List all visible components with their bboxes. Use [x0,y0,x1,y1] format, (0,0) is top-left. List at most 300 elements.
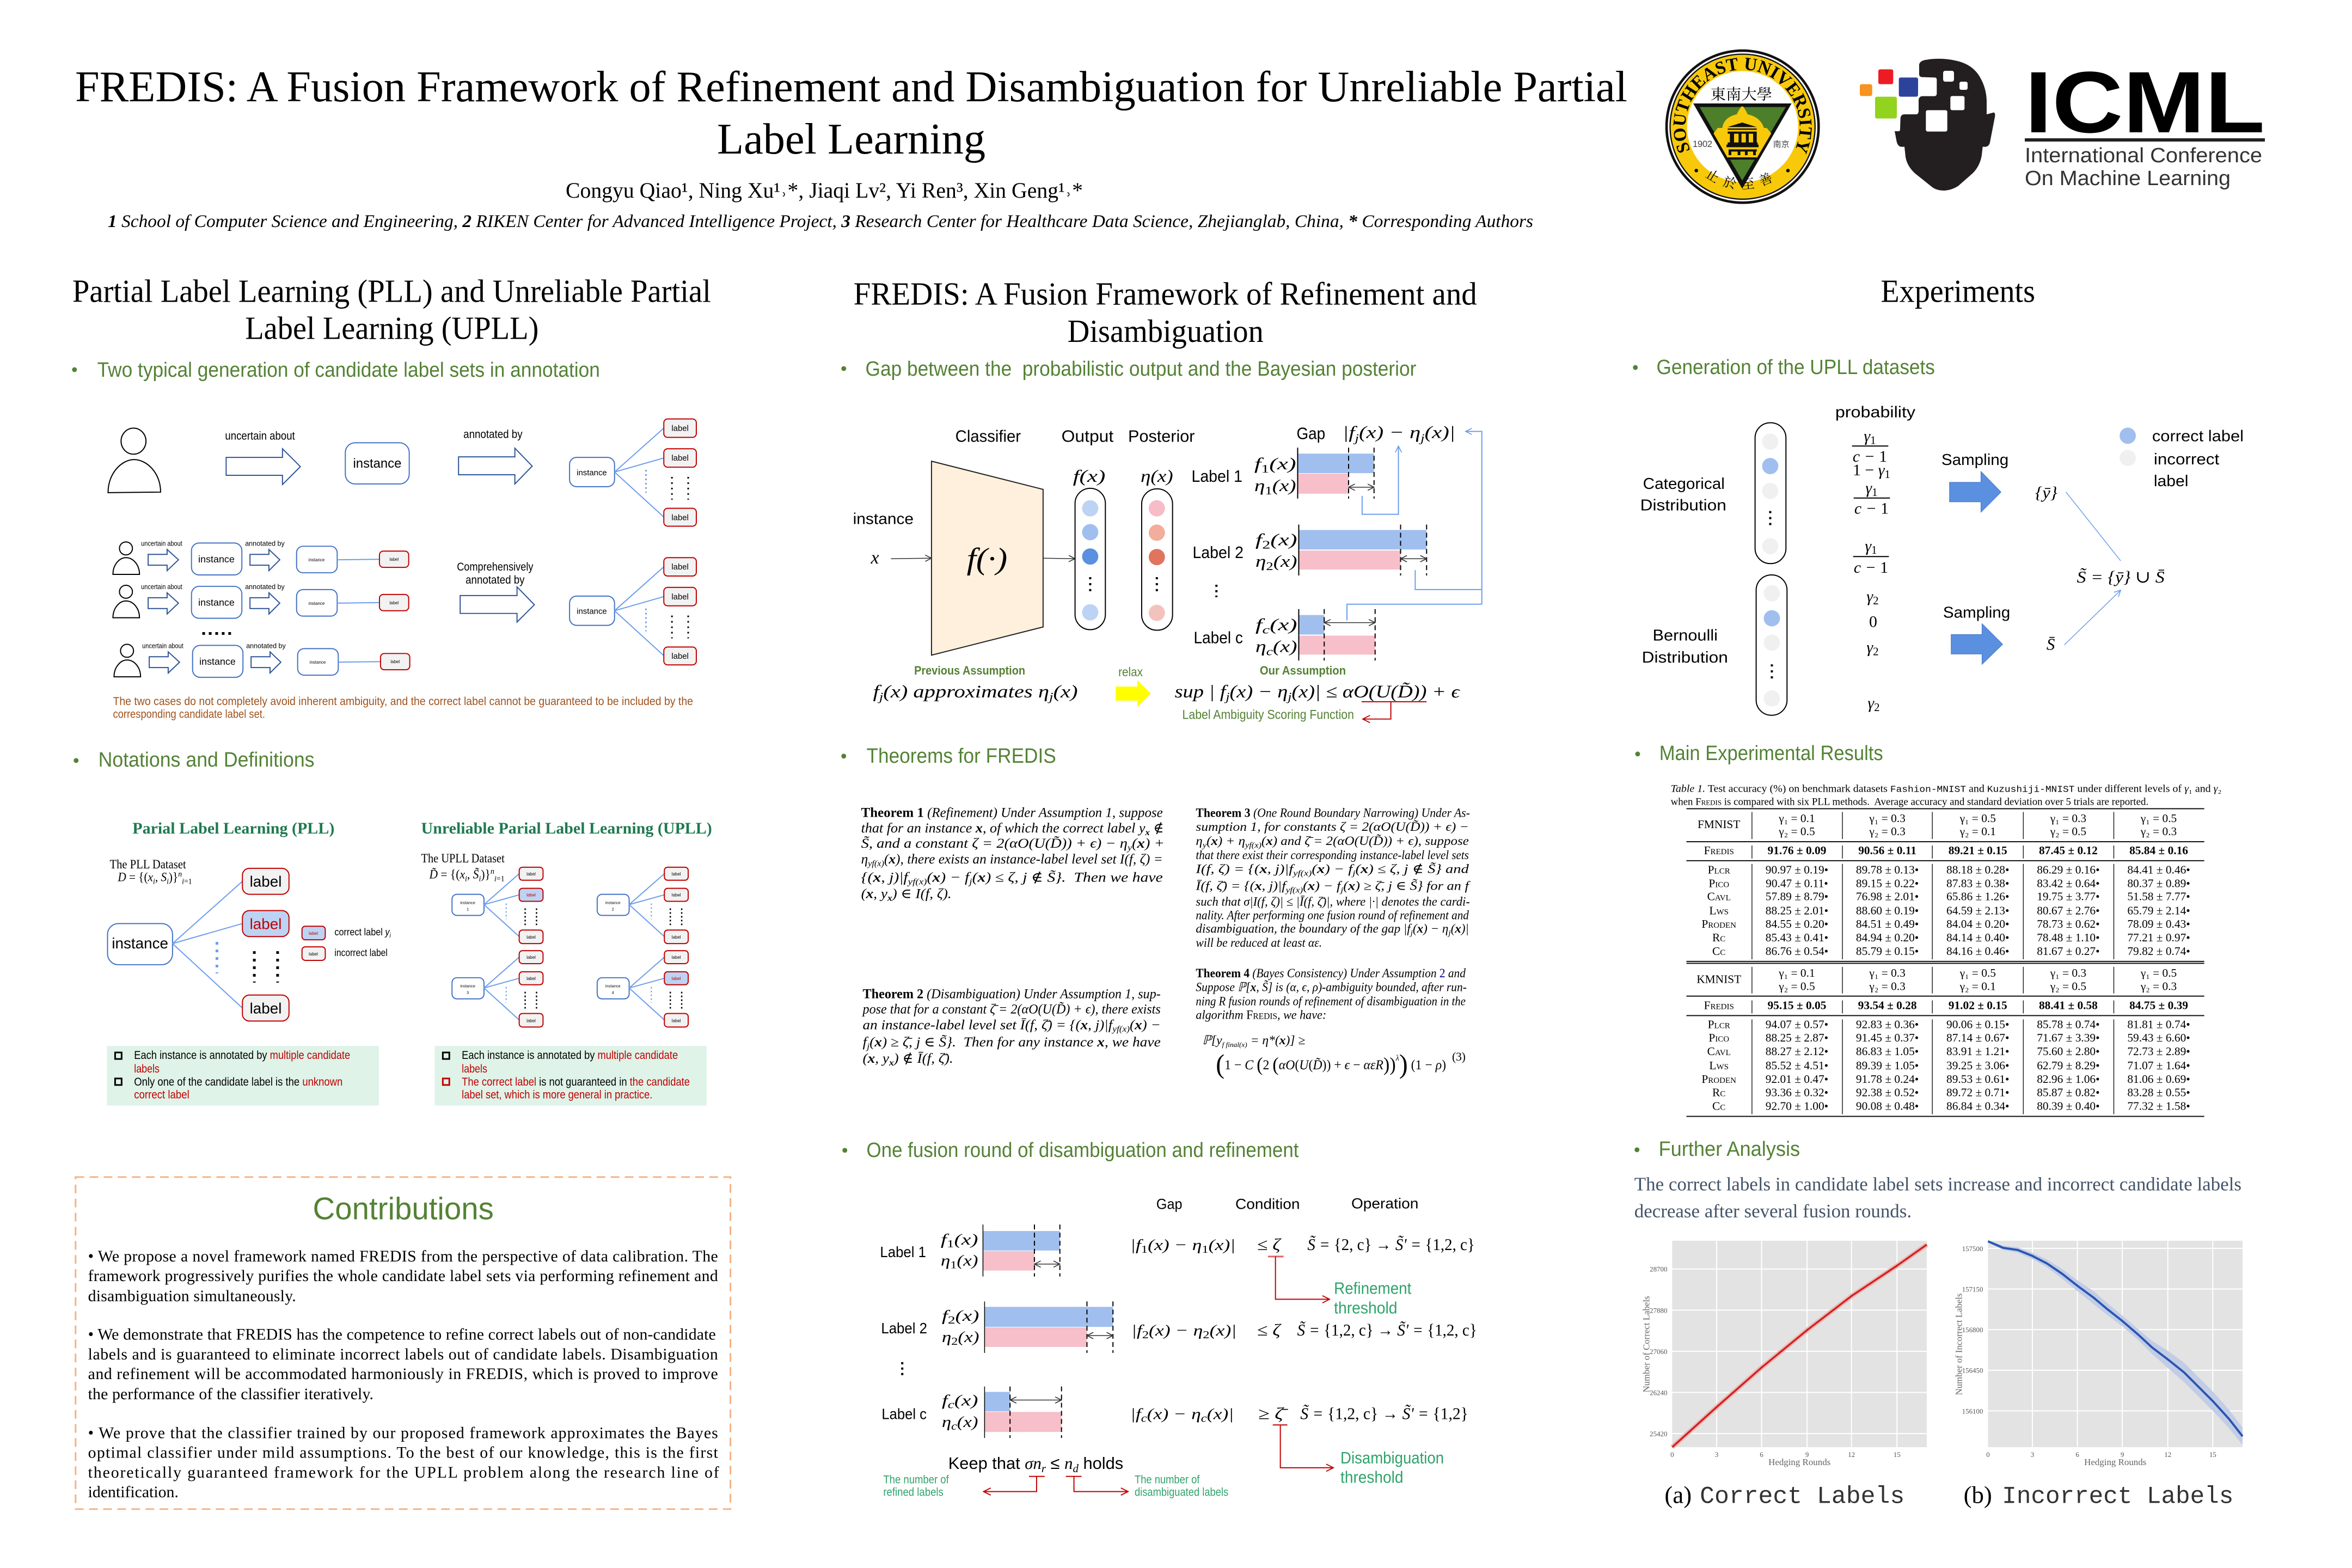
text block: theorem 4: Suppose ℙ[x, S̃] is (α, ϵ, ρ)-ambiguity bounded, after run- [1196,980,1467,994]
tree: instance 1: 1 [467,906,469,911]
fusion row: label 2: 2 [948,1314,955,1326]
previous assumption: Previous Assumption [914,664,1025,677]
text block: contribution 3: theoretically guaranteed framework for the UPLL problem along the research line of [88,1463,719,1481]
text block: contribution 1: • We propose a novel framework named FREDIS from the perspective of data calibration. The [88,1247,718,1265]
diagram: single annotator [108,419,696,526]
text block: theorem 3: x) − f [1308,879,1337,893]
text block: theorem 1: ( [884,852,890,867]
gap row: label c: (x) [1273,637,1297,656]
tree: instance 4: 4 [612,990,614,995]
text block: theorem 2: yf(x) [1111,1025,1130,1034]
text block: theorem 4: f final(x) [1222,1040,1247,1049]
table section: KMNIST: γ₁ = 0.5 [1959,966,1996,979]
text block: theorem 2: x) ≥ ζ̄, j ∈ S̃}. Then for any instance x, we have [874,1035,1155,1050]
probability column: probability [1835,404,1916,421]
chart: incorrect labels: 157500 [1962,1245,1983,1253]
icon: Southeast University seal: SOUTHEAST UNIVERSITY [1673,58,1812,155]
table section: FMNIST: Plcr [1708,863,1730,877]
text block: theorem 3: Ī(f, ζ̄) = {( x, j)|f [1196,879,1283,893]
subheading: candidate label sets: Two typical generation of candidate label sets in annotation [97,359,600,382]
table: accuracy [1687,808,2204,1116]
panel: fusion round [842,1139,1477,1499]
input instance: instance [853,511,914,528]
chart: correct labels: 12 [1848,1450,1855,1459]
text block: theorem 1: x [1144,828,1150,837]
diagram: UPLL dataset: )} [481,868,491,881]
table section: FMNIST: 76.98 ± 2.01• [1856,890,1919,903]
callout: refinement threshold: Refinement [1334,1278,1412,1297]
caption: correct labels: Correct Labels [1700,1484,1904,1511]
keep condition [883,1454,1228,1499]
keep condition: refined labels [883,1486,944,1499]
title: Label Learning [717,115,985,163]
text block: theorem 3: ( [1206,834,1212,848]
probability column: 1 [1871,543,1877,556]
fusion row: label 1: |f [1130,1236,1139,1254]
table section: KMNIST: 90.06 ± 0.15• [1946,1018,2009,1031]
arrow: sampling 1: Sampling [1941,451,2008,469]
text block: theorem 4: C [1245,1058,1254,1073]
text block: theorem 3: ( [1451,922,1456,935]
table section: FMNIST: 84.51 ± 0.49• [1856,917,1919,930]
table section: KMNIST: KMNIST [1696,973,1741,986]
table section: KMNIST: γ₂ = 0.5 [1778,980,1815,993]
table section: FMNIST: γ₂ = 0.1 [1959,825,1996,838]
table section: FMNIST: 84.55 ± 0.20• [1766,917,1828,930]
text block: theorem 3: x) − η [1417,922,1448,935]
text block: theorem 4: λ [1395,1054,1399,1063]
fusion row: label c: c [948,1399,954,1411]
diagram: annotator row 2 [113,583,409,618]
diagram: annotator row 1: uncertain about [141,539,182,547]
fusion row: label c: f [942,1392,946,1409]
text block: theorem 4: ρ) [1436,1058,1446,1073]
table section: FMNIST: 83.42 ± 0.64• [2037,877,2100,890]
fusion row: label 2: (x) [958,1328,979,1346]
diagram: PLL dataset: label [250,1000,281,1016]
diagram: annotator row 3: label [390,659,400,664]
chart: incorrect labels: 156450 [1962,1367,1983,1375]
icon: Southeast University seal: 1902 [1693,139,1712,149]
table section: KMNIST: 86.84 ± 0.34• [1946,1100,2009,1113]
gap row: label 2 [1192,525,1426,575]
table section: FMNIST: 88.60 ± 0.19• [1856,904,1919,917]
table section: KMNIST: Pico [1708,1031,1729,1044]
table section: KMNIST: 89.39 ± 1.05• [1856,1059,1919,1072]
keep condition: Keep that σn [948,1454,1042,1473]
text block: theorem 3: x) − f [1317,862,1347,876]
table section: KMNIST: 93.54 ± 0.28 [1858,999,1917,1012]
column headers: Condition [1235,1196,1300,1212]
fusion row: label 1: (x)| [1209,1236,1235,1254]
gap row: label 2: Label 2 [1192,543,1244,562]
text block: theorem 3: ( [1261,834,1267,848]
previous assumption: (x) [1054,682,1078,702]
text block: theorem 4: 2 [1263,1058,1272,1073]
table section: KMNIST: Proden [1701,1073,1736,1086]
previous assumption [873,664,1078,703]
table section: FMNIST: γ₁ = 0.1 [1778,812,1815,825]
text block: analysis: The correct labels in candidate label sets increase and incorrect candidate labels [1634,1173,2241,1195]
table section: KMNIST [1696,966,2190,1113]
chart: correct labels: 9 [1805,1450,1809,1459]
keep condition: n [1064,1454,1073,1473]
fusion row: label c: S̃ = {1,2, c} → S̃' = {1,2} [1300,1404,1468,1423]
legend: correct and incorrect: correct label y [334,927,390,938]
table section: KMNIST: γ₂ = 0.3 [2140,980,2177,993]
text block: theorem 4: αO [1279,1058,1295,1073]
previous assumption: j [877,690,883,703]
tree: instance 3: instance [460,984,475,989]
callout: UPLL properties: The correct label is not guaranteed in the candidate [462,1076,690,1088]
text block: theorem 4: (3) [1452,1050,1466,1063]
gap row: label 2: (x) [1270,530,1297,549]
chart: incorrect labels: Number of Incorrect Labels [1954,1293,1964,1395]
text block: theorem 3: x)| [1455,922,1469,935]
arrow: sampling 2: Sampling [1943,604,2010,622]
diagram: comprehensively annotated: label [671,562,689,572]
diagram: annotator row 2: instance [309,601,325,606]
tree: instance 1 [452,867,543,944]
input instance [853,511,1075,568]
tree: instance 2: label [672,893,681,898]
table section: KMNIST: 93.36 ± 0.32• [1766,1086,1828,1099]
column headers [1156,1195,1418,1212]
diagram: annotator row 3: uncertain about [142,641,183,650]
ellipsis dots [203,632,235,635]
table rules [1687,808,2204,1116]
table section: KMNIST: 71.67 ± 3.39• [2037,1031,2100,1044]
callout: PLL properties: labels [134,1063,160,1075]
legend: label [2154,473,2189,490]
table section: FMNIST: 77.21 ± 0.97• [2127,931,2190,944]
text block: contribution 3: identification. [88,1483,179,1501]
tree: instance 2: 2 [612,906,614,911]
fusion row: label 1: S̃ = {2, c} → S̃' = {1,2, c} [1307,1235,1475,1254]
probability column: γ [1867,694,1874,712]
table section: KMNIST: 91.45 ± 0.37• [1856,1031,1919,1044]
fusion row: label c: c [1201,1412,1207,1424]
diagram: single annotator: label [671,424,689,433]
probability column: 2 [1874,701,1880,714]
icon: ICML head logo [1860,59,1995,191]
gap row: label 2: f [1255,530,1260,549]
diagram: comprehensively annotated: instance [577,607,607,616]
table section: FMNIST: 19.75 ± 3.77• [2037,890,2100,903]
diagram: PLL dataset: i=1 [182,878,193,886]
panel: notations and definitions [74,749,712,1106]
diagram: PLL dataset: i [167,878,169,886]
text block: theorem 2: x) − [1135,1018,1159,1032]
diagram: UPLL dataset: S̃ [473,867,480,881]
tree: instance 3: label [526,955,536,960]
table section: FMNIST: 84.16 ± 0.46• [1946,945,2009,958]
table section: KMNIST: 90.08 ± 0.48• [1856,1100,1919,1113]
note: inherent ambiguity: corresponding candidate label set. [113,708,265,721]
text block: theorem 4: = η*( [1247,1033,1280,1047]
probability column: 1 [1872,486,1878,499]
chart: incorrect labels: Hedging Rounds [2084,1457,2146,1467]
diagram: UPLL dataset: The UPLL Dataset [421,852,505,865]
probability column: γ [1866,638,1873,656]
table section: FMNIST: 64.59 ± 2.13• [1946,904,2009,917]
callout: PLL properties [107,1046,379,1106]
gap row: label 1: 1 [1265,484,1272,497]
table section: KMNIST: Cavl [1707,1045,1731,1058]
text block: theorem 3: j [1447,929,1451,938]
text block: theorem 1: ( [927,871,933,885]
keep condition: The number of [883,1474,949,1486]
diagram: PLL dataset [108,857,289,1021]
text block: theorem 3: ( [1355,862,1362,876]
fusion row: label 1 [880,1224,1475,1277]
fusion row: label 1: (x) [954,1231,978,1248]
gap row: label 1: 1 [1261,462,1269,475]
diagram: annotator row 1: instance [198,554,235,565]
text block: theorem 3: Theorem 3 (One Round Boundary Narrowing) Under As- [1196,806,1470,819]
text block: theorem 4: ) [1399,1049,1408,1079]
table section: FMNIST: 65.86 ± 1.26• [1946,890,2009,903]
table section: KMNIST: 81.06 ± 0.69• [2127,1073,2190,1086]
keep condition: d [1073,1462,1079,1475]
column labels [955,426,1195,486]
chart: incorrect labels: 157150 [1962,1285,1983,1294]
table section: KMNIST: 80.39 ± 0.40• [2037,1100,2100,1113]
table section: KMNIST: 87.14 ± 0.67• [1946,1031,2009,1044]
gap row: label 2: 2 [1266,560,1273,573]
callout: disambiguation threshold: threshold [1340,1468,1403,1487]
probability column: γ [1865,479,1872,497]
callout: UPLL properties: label set, which is more general in practice. [462,1089,652,1101]
chart: correct labels [1641,1241,1927,1467]
result formula [2035,483,2165,653]
diagram: single annotator: uncertain about [225,430,295,442]
gap heading: j [1353,431,1359,444]
fusion row: label 1: ≤ ζ [1257,1235,1282,1254]
probability column: 1 − γ [1853,461,1884,479]
gap row: label 2: η [1255,552,1264,571]
table section: FMNIST: 87.83 ± 0.38• [1946,877,2009,890]
table section: FMNIST: 86.29 ± 0.16• [2037,863,2100,877]
text block: theorem 1: ( [972,871,979,885]
tree: instance 4: label [672,955,681,960]
fusion row: label 1: (x) − η [1148,1236,1202,1254]
diagram: annotator row 1: label [389,557,399,562]
subheading: fusion round: One fusion round of disambiguation and refinement [867,1139,1299,1162]
table section: FMNIST: 81.67 ± 0.27• [2037,945,2100,958]
diagram: annotator row 3: annotated by [246,641,286,650]
table section: KMNIST: 85.87 ± 0.82• [2037,1086,2100,1099]
table section: KMNIST: γ₁ = 0.1 [1778,966,1815,979]
table section: FMNIST: 78.09 ± 0.43• [2127,917,2190,930]
table section: FMNIST: 84.94 ± 0.20• [1856,931,1919,944]
fusion row: label 1: 1 [947,1238,954,1250]
fusion row: label c: (x)| [1207,1405,1234,1423]
table section: KMNIST: Lws [1709,1059,1729,1072]
fusion row: label c: c [1141,1412,1147,1424]
table section: KMNIST: 88.25 ± 2.87• [1766,1031,1828,1044]
column labels: η(x) [1141,467,1173,486]
our assumption: sup | f [1175,682,1218,702]
table section: KMNIST: 72.73 ± 2.89• [2127,1045,2190,1058]
connector arrows [1347,431,1482,621]
table section: FMNIST: γ₁ = 0.5 [1959,812,1996,825]
our assumption: Our Assumption [1260,664,1346,677]
fusion row: label c: (x) − η [1147,1405,1201,1423]
diagram: annotator row 3: instance [199,656,236,667]
text block: theorem 1: x) − f [932,871,965,885]
chart: correct labels: 26240 [1650,1389,1667,1397]
our assumption [1175,664,1461,722]
text block: contribution 1: framework progressively purifies the whole candidate label sets via performing refinement and [88,1267,718,1285]
column labels: Output [1062,426,1114,445]
our assumption: Label Ambiguity Scoring Function [1183,708,1354,722]
gap heading: Gap [1296,424,1325,443]
diagram: annotator row 1: instance [309,558,325,562]
text block: theorem 2: ) ∉ Ī(f, ζ̄). [892,1051,953,1066]
text block: theorem 1: x [887,893,892,903]
text block: contribution 2: labels and is guaranteed to eliminate incorrect labels out of candidate labels. Disambiguation [88,1345,718,1363]
icon: ICML wordmark [2025,53,2265,190]
text block: theorem 4: 1 − [1224,1058,1245,1073]
text block: theorem 2: f [863,1035,866,1050]
text block: theorem 2 [862,987,1161,1068]
text block: theorem 1: S̃, and a constant ζ = 2(αO(U(D̃)) + ϵ) − η [861,836,1093,851]
note: inherent ambiguity [113,695,693,721]
table section: FMNIST: γ₁ = 0.3 [2050,812,2086,825]
gap row: label 1: f [1254,455,1259,473]
fusion row: label 2: ≤ ζ [1257,1321,1282,1339]
table section: FMNIST: γ₂ = 0.5 [1778,825,1815,838]
table section: KMNIST: 88.41 ± 0.58 [2039,999,2098,1012]
text block: contribution 2: and refinement will be accommodated harmoniously in FREDIS, which is proved to improve [88,1365,718,1383]
text block: theorem 1: ( [1132,836,1138,851]
legend: correct and incorrect: i [390,932,391,939]
legend: correct and incorrect: label [309,952,318,957]
diagram: comprehensively annotated: label [671,652,689,661]
text block: theorem 3: will be reduced at least αε. [1196,936,1322,950]
column headers: Gap [1156,1196,1183,1212]
our assumption: (x) − η [1230,682,1288,702]
table section: FMNIST: Pico [1708,877,1729,890]
diagram: PLL dataset: )} [169,871,178,884]
chart: correct labels: Hedging Rounds [1768,1457,1830,1467]
probability column: γ [1866,587,1873,605]
probability column: γ [1864,427,1870,445]
diagram: UPLL dataset [421,852,688,1027]
table section: FMNIST: FMNIST [1698,818,1740,831]
title: FREDIS: A Fusion Framework of Refinement and Disambiguation for Unreliable Partial [75,63,1627,111]
panel: main experimental results [1635,742,2221,1116]
our assumption: (x)| ≤ αO(U(D̃)) + ϵ [1291,682,1461,702]
probability column: 2 [1873,645,1879,658]
table section: KMNIST: 85.52 ± 4.51• [1766,1059,1828,1072]
chart: incorrect labels: 12 [2164,1450,2171,1459]
subheading: further analysis: Further Analysis [1659,1138,1800,1161]
text block: theorem 4: algorithm Fredis, we have: [1196,1008,1326,1021]
callout: UPLL properties: labels [462,1063,487,1075]
diagram: annotator row 2: annotated by [245,583,285,591]
gap heading: j [1418,431,1425,444]
bernoulli distribution: Bernoulli [1653,627,1718,644]
diagram: PLL dataset: D = {(x [118,871,154,884]
fusion row: label c: ≥ ζ̄ [1258,1404,1288,1423]
text block: theorem 2: ( [1130,1018,1136,1032]
text block: theorem 3: x) + η [1211,834,1243,848]
tree: instance 4: instance [605,984,621,989]
gap heading: (x)| [1425,422,1455,442]
heading: experiments: Experiments [1881,273,2035,309]
icon: ICML wordmark: ICML [2025,53,2265,151]
table section: KMNIST: 94.07 ± 0.57• [1766,1018,1828,1031]
chart: incorrect labels: 156100 [1962,1407,1983,1415]
icon: Southeast University seal: 止於至善 [1705,170,1772,189]
diagram: UPLL dataset: , [467,868,473,881]
table section: FMNIST: γ₂ = 0.3 [2140,825,2177,838]
text block: theorem 2: ( [869,1035,875,1050]
diagram: UPLL dataset: n [491,867,494,876]
panel: PLL and UPLL introduction [72,273,711,721]
table section: KMNIST: 92.70 ± 1.00• [1766,1100,1828,1113]
text block: theorem 1: ∉ [1150,821,1164,836]
table section: FMNIST: 85.43 ± 0.41• [1766,931,1828,944]
fusion row: label 2: 2 [1142,1329,1149,1341]
caption: incorrect labels: (b) [1964,1481,1998,1509]
callout: UPLL properties: Each instance is annotated by multiple candidate [462,1049,678,1062]
table section: KMNIST: 89.72 ± 0.71• [1946,1086,2009,1099]
probability column: c − 1 [1854,559,1888,577]
table section: FMNIST: γ₂ = 0.3 [1869,825,1906,838]
table section: FMNIST: 90.47 ± 0.11• [1766,877,1828,890]
table section: KMNIST: 59.43 ± 6.60• [2127,1031,2190,1044]
tree: instance 2 [597,867,688,944]
bernoulli distribution: Distribution [1642,649,1728,666]
fusion row: label c: |f [1130,1405,1139,1423]
gap heading: |f [1343,422,1352,442]
text block: theorem 4: ℙ[y [1202,1033,1221,1047]
diagram: comprehensively annotated: annotated by [465,574,525,586]
diagram: PLL dataset: n [178,870,182,879]
chart: incorrect labels [1954,1240,2243,1467]
diagram: single annotator: label [671,513,689,523]
tree: instance 2: label [672,935,681,940]
heading: UPLL: Unreliable Parial Label Learning (UPLL) [421,819,712,837]
gap row: label c: c [1262,623,1270,636]
tree: instance 1: label [526,872,536,877]
callout: PLL properties: Only one of the candidate label is the unknown [134,1076,342,1088]
chart: correct labels: 6 [1760,1450,1763,1459]
text block: theorem 4: )) [1383,1054,1396,1075]
diagram: annotator row 1: annotated by [245,539,285,547]
column headers: Operation [1351,1195,1418,1211]
panel: experiments generation [1633,273,2244,715]
text block: contribution 1 [88,1247,718,1305]
table section: KMNIST: 92.38 ± 0.52• [1856,1086,1919,1099]
table section: KMNIST: 84.75 ± 0.39 [2129,999,2188,1012]
previous assumption: j [1047,690,1054,703]
text block: theorem 1: η [861,852,868,867]
table section: KMNIST: 92.01 ± 0.47• [1766,1073,1828,1086]
table section: FMNIST: 85.84 ± 0.16 [2129,844,2188,857]
text block: theorem 1: yf(x) [867,859,884,868]
chart: correct labels: 25420 [1650,1430,1667,1438]
heading: PLL: Parial Label Learning (PLL) [132,819,334,837]
text block: theorem 3: yf(x) [1292,869,1312,878]
tree: instance 1: label [526,893,536,898]
arrow: sampling 1 [1941,451,2008,512]
text block: theorem 1: j [968,878,972,887]
probability column: 1 [1884,468,1890,481]
